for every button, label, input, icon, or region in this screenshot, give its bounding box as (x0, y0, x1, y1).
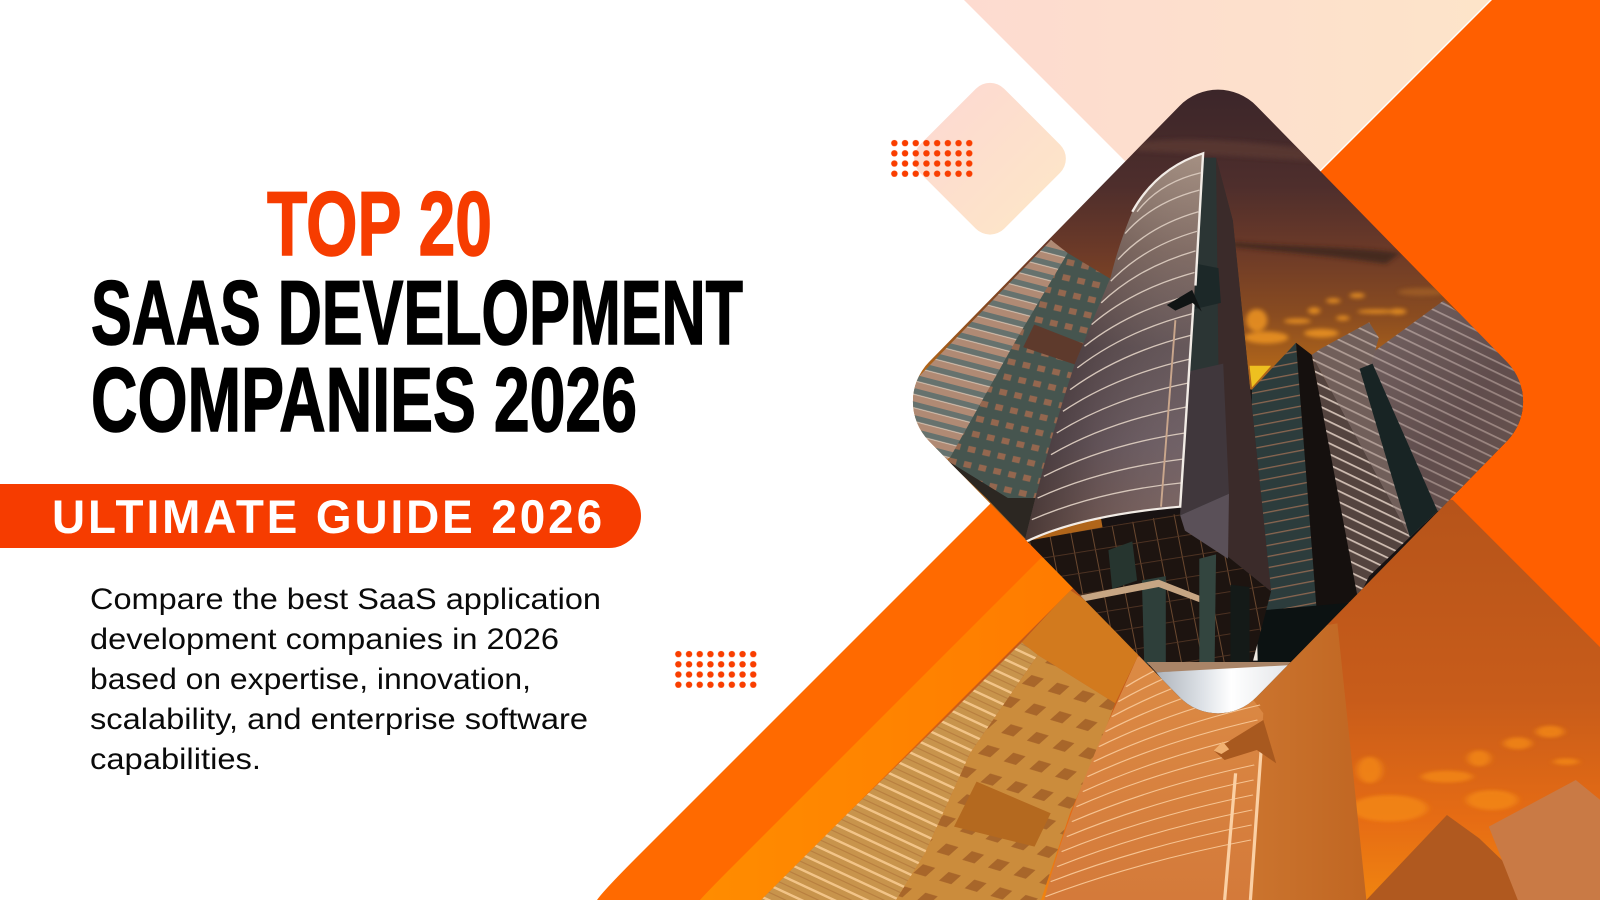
title: saas development: SAAS DEVELOPMENT (91, 263, 743, 364)
title: top 20: TOP 20 (267, 174, 492, 275)
title: companies 2026: COMPANIES 2026 (91, 350, 637, 451)
description text: based on expertise, innovation, (90, 663, 531, 696)
decoration: dark orange diagonal stripe (597, 500, 1200, 900)
right buildings (1250, 301, 1534, 665)
description text (90, 583, 601, 776)
backing shadow (1101, 380, 1524, 714)
tower dark face (1180, 158, 1271, 591)
decoration: orange right panel (1100, 0, 1600, 900)
decoration: peach rounded diamond (906, 75, 1074, 243)
base of tower (1025, 513, 1293, 672)
curved tower face (1025, 153, 1203, 542)
description text: development companies in 2026 (90, 623, 559, 656)
description text: Compare the best SaaS application (90, 583, 601, 616)
decoration: peach triangle (964, 0, 1490, 263)
photo: skyscrapers in rounded diamond (893, 82, 1534, 732)
dot grid: middle (673, 649, 759, 690)
description text: scalability, and enterprise software (90, 703, 588, 736)
description text: capabilities. (90, 743, 261, 776)
banner: ultimate guide: ULTIMATE GUIDE 2026 (52, 490, 605, 543)
plaza reflection (1156, 665, 1288, 714)
left building (898, 240, 1111, 541)
tinted lower photo panel (761, 500, 1600, 900)
decoration: bright orange diagonal stripe (700, 558, 1100, 900)
dot grid: top (889, 138, 975, 179)
